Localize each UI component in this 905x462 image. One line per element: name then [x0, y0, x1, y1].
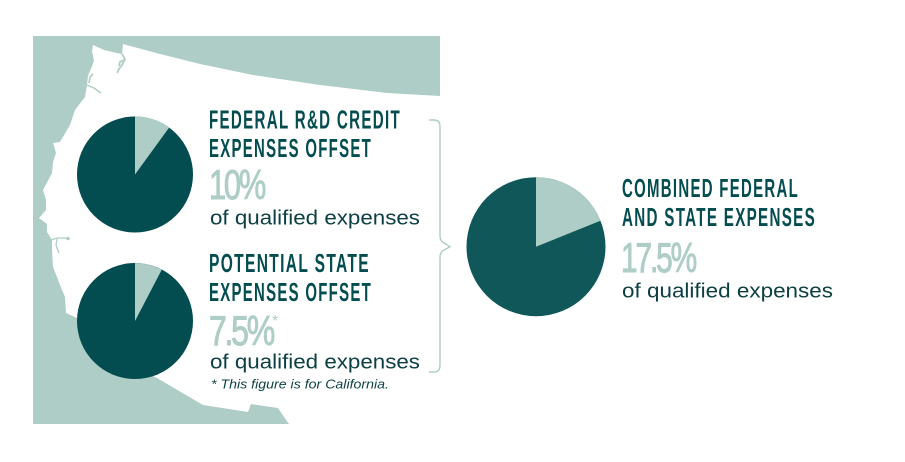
text block: state offset: of qualified expenses	[210, 352, 420, 374]
text block: state offset: * This figure is for California.	[211, 378, 389, 392]
bracket	[429, 120, 450, 372]
text block: federal credit	[209, 106, 420, 230]
pie chart: combined 17.5%	[466, 177, 606, 316]
text block: combined: of qualified expenses	[622, 280, 833, 302]
pie chart: state 7.5%	[77, 263, 193, 379]
text block: state offset: 7.5%	[209, 307, 274, 354]
text block: state offset	[209, 250, 420, 392]
text block: federal credit: EXPENSES OFFSET	[209, 135, 372, 163]
text block: state offset: EXPENSES OFFSET	[209, 279, 372, 307]
text block: state offset: POTENTIAL STATE	[209, 250, 370, 278]
text block: state offset: *	[272, 313, 278, 330]
text block: combined	[621, 175, 833, 302]
text block: federal credit: of qualified expenses	[210, 208, 420, 230]
pie chart: federal 10%	[77, 116, 193, 232]
map background	[33, 36, 440, 424]
text block: federal credit: 10%	[209, 161, 265, 208]
text block: federal credit: FEDERAL R&D CREDIT	[209, 106, 401, 134]
text block: combined: 17.5%	[621, 234, 696, 281]
